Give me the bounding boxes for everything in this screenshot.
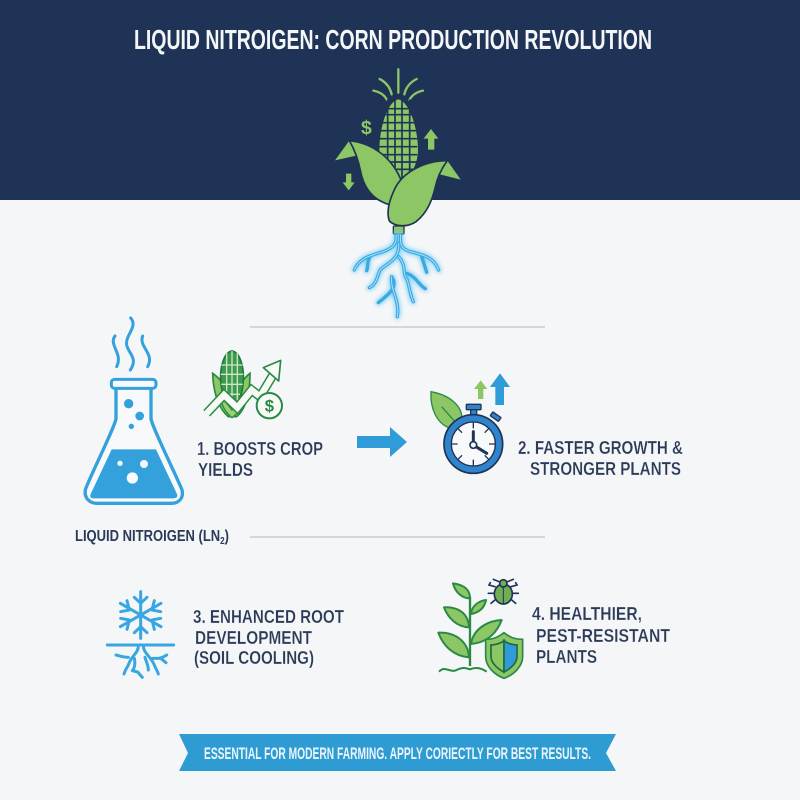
item 2 text: STRONGER PLANTS [530, 459, 681, 479]
up arrow [424, 129, 438, 150]
item 2 text [518, 438, 683, 479]
rising arrow [207, 360, 281, 413]
item 2 text: 2. FASTER GROWTH & [518, 438, 683, 458]
corn silk [373, 69, 423, 100]
item 4 text: PEST-RESISTANT [536, 626, 670, 646]
icon: corn with rising chart and coin [207, 351, 282, 418]
icon: healthy plant, pest and shield [438, 579, 523, 678]
header band [0, 0, 800, 200]
leaf [431, 392, 462, 428]
item 3 text: (SOIL COOLING) [194, 648, 314, 668]
flask label: LIQUID NITROIGEN (LN [75, 528, 254, 545]
snowflake [120, 592, 161, 638]
item 1 text: YIELDS [198, 460, 253, 480]
crown [466, 404, 501, 421]
plant [438, 583, 502, 672]
flask rim [111, 379, 156, 388]
item 3 text [193, 607, 344, 668]
husk front [220, 395, 245, 418]
vapor [113, 318, 150, 370]
icon: snowflake and roots [107, 592, 174, 677]
up arrow large [490, 373, 510, 405]
soil line [107, 640, 174, 649]
icon: corn plant with roots [335, 69, 461, 317]
icon: stopwatch with leaf and arrows [431, 373, 510, 473]
watch face [444, 415, 503, 473]
pest beetle [488, 579, 518, 604]
icon: liquid nitrogen flask [85, 318, 182, 503]
item 4 text: PLANTS [536, 647, 597, 667]
item 4 text: 4. HEALTHIER, [532, 604, 642, 624]
down arrow [343, 174, 355, 190]
arrow: right [357, 427, 407, 457]
liquid [90, 449, 177, 498]
roots [116, 646, 167, 677]
flask label: ) [225, 528, 229, 545]
coin: $ [265, 397, 275, 416]
item 1 text: 1. BOOSTS CROP [197, 439, 323, 459]
flask outline [85, 388, 182, 503]
corn ear [379, 99, 418, 182]
divider top [250, 326, 545, 328]
glowing roots [354, 235, 439, 317]
dollar sign: $ [361, 118, 372, 139]
up arrow small [474, 380, 487, 399]
banner [179, 734, 616, 771]
stem [393, 226, 404, 234]
right leaf [388, 161, 461, 226]
flask label: 2 [220, 536, 225, 547]
bubbles [117, 399, 148, 484]
ear [221, 351, 243, 410]
husk leaves [213, 373, 250, 417]
item 3 text: DEVELOPMENT [195, 628, 312, 648]
left leaf [335, 141, 402, 205]
item 3 text: 3. ENHANCED ROOT [193, 607, 344, 627]
divider middle [250, 536, 545, 538]
shield [486, 633, 523, 678]
item 4 text [532, 604, 670, 667]
item 1 text [197, 439, 323, 480]
